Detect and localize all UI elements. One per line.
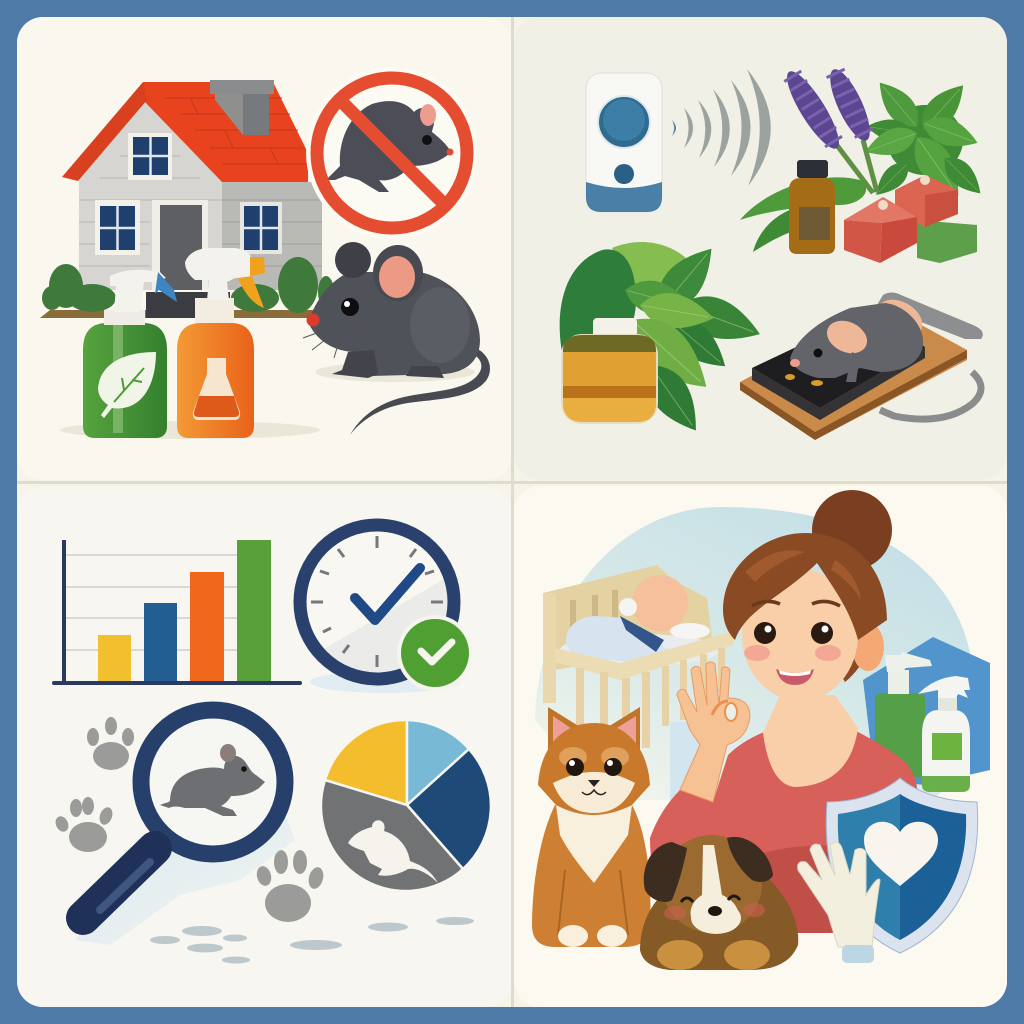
- panel: house and repellent: [17, 17, 512, 480]
- icon: spray bottles behind: [863, 637, 990, 792]
- icon: mouse on glue trap: [740, 292, 983, 440]
- panel: natural remedies: [514, 17, 1007, 480]
- icon: oil jar with leaves: [560, 237, 767, 441]
- icon: house: [40, 80, 334, 318]
- icon: clock with check: [300, 525, 473, 693]
- icon: woman: [650, 490, 918, 933]
- icon: dog: [640, 835, 798, 970]
- icon: cat: [532, 707, 650, 947]
- icon: green natural spray bottle: [60, 270, 320, 439]
- icon: lavender and mint with soap: [740, 65, 988, 263]
- pie chart: [321, 720, 491, 891]
- icon: magnifying glass with mouse: [75, 710, 295, 945]
- icon: smudged footprints: [150, 917, 474, 964]
- background wash: [535, 507, 975, 800]
- icon: OK hand gesture: [677, 662, 750, 802]
- bar chart: [54, 540, 300, 684]
- panel: monitoring and data: [17, 486, 512, 1007]
- icon: prohibited mouse sign: [306, 67, 478, 239]
- panel: family safety: [514, 486, 1007, 1007]
- icon: ultrasonic device: [586, 69, 771, 212]
- icon: paw prints: [53, 717, 326, 922]
- icon: orange chemical spray bottle: [177, 248, 265, 438]
- icon: glove: [798, 842, 880, 963]
- icon: sound waves: [672, 69, 771, 186]
- icon: shield with heart: [826, 778, 978, 953]
- icon: large mouse: [303, 242, 490, 435]
- icon: crib with baby: [543, 565, 733, 802]
